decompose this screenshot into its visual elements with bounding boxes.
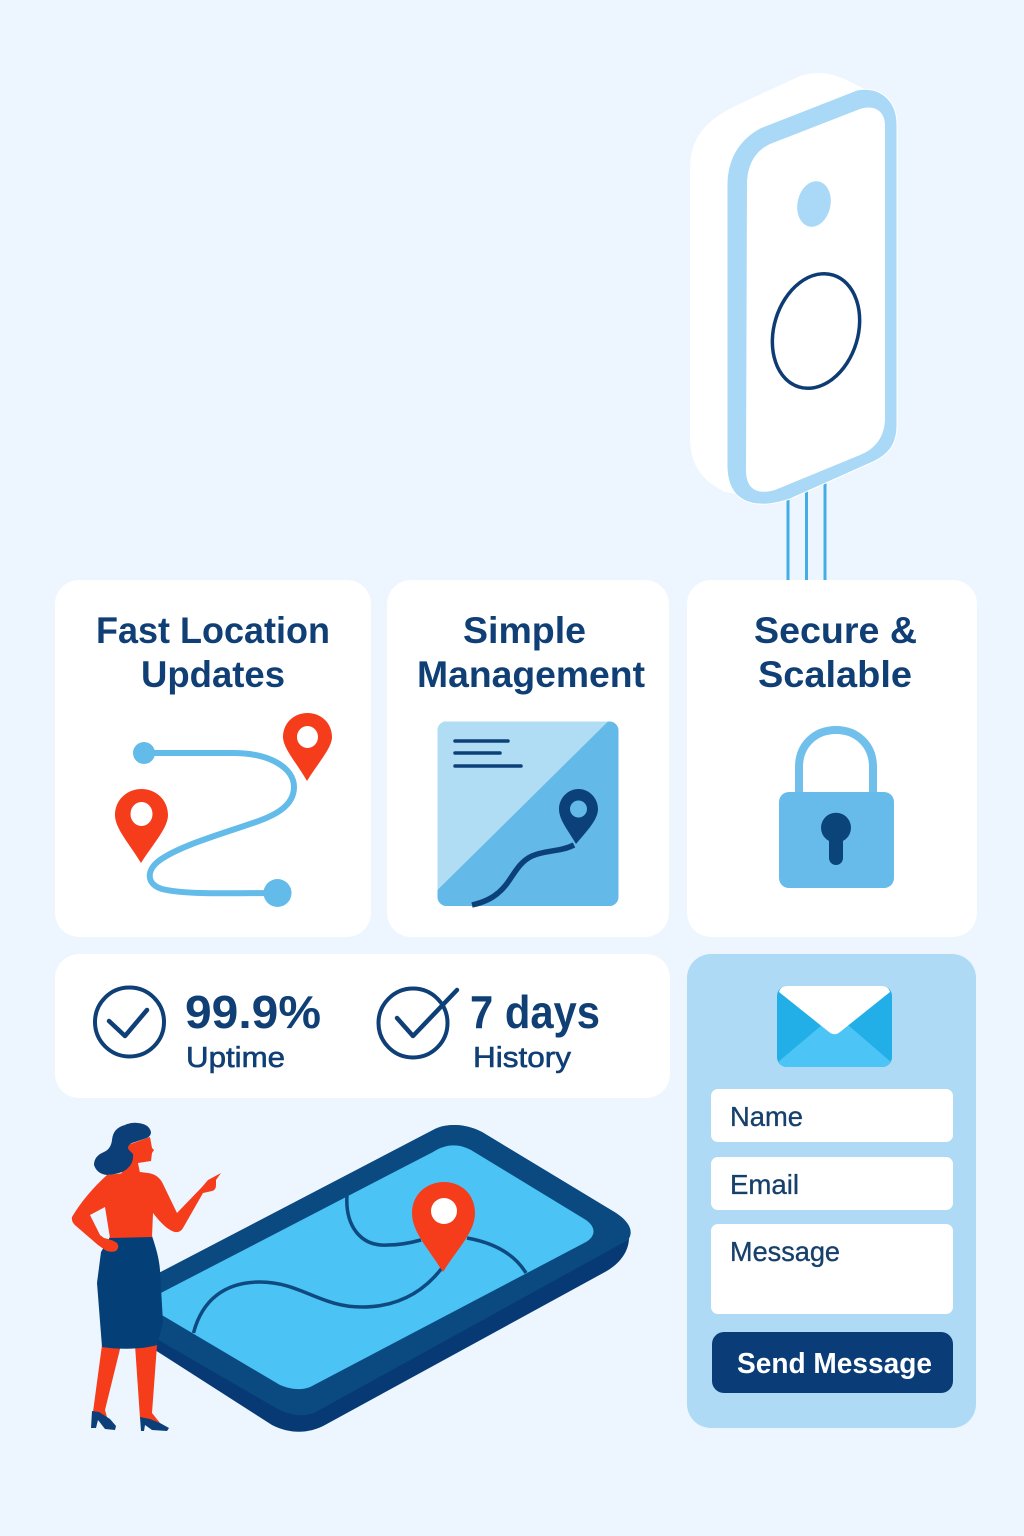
stat: history value: 7 days — [470, 986, 600, 1038]
panel: contact form — [687, 954, 976, 1428]
envelope top flap — [779, 986, 890, 1034]
woman legs — [93, 1345, 160, 1423]
pin lower hole — [130, 802, 152, 826]
card background — [687, 580, 977, 937]
heading: Secure & — [754, 610, 917, 651]
device front frame — [727, 89, 897, 504]
document folded light area — [438, 722, 608, 890]
lock keyhole — [821, 813, 851, 865]
button: send message — [712, 1332, 953, 1393]
map pin hole — [431, 1198, 457, 1224]
stats background — [55, 954, 670, 1098]
pin upper — [283, 713, 332, 781]
panel: stats — [55, 954, 670, 1098]
document text lines — [455, 741, 521, 766]
illustration: phone with map — [155, 1125, 631, 1432]
card background — [55, 580, 371, 937]
icon: uptime check — [95, 988, 164, 1056]
field: name: Name — [730, 1101, 803, 1132]
heading: Updates — [141, 654, 285, 695]
panel: secure and scalable — [687, 580, 977, 937]
map road — [472, 845, 574, 905]
device face — [746, 107, 885, 492]
device button ring — [759, 263, 873, 399]
woman skirt — [97, 1236, 163, 1349]
stat: uptime label: Uptime — [186, 1042, 285, 1074]
heading: Fast Location — [96, 610, 330, 651]
phone top face — [155, 1125, 631, 1415]
card background — [387, 580, 669, 937]
panel: simple management — [387, 580, 669, 937]
woman body and arms — [72, 1172, 221, 1252]
device cables — [788, 483, 825, 580]
pin upper hole — [297, 726, 318, 748]
route path — [144, 753, 294, 893]
icon: history check — [378, 988, 457, 1058]
stat: uptime value: 99.9% — [185, 986, 321, 1038]
heading: Management — [417, 654, 645, 695]
map pin — [559, 789, 598, 844]
phone side — [155, 1125, 629, 1432]
button: send message: Send Message — [737, 1348, 932, 1380]
device sensor — [793, 178, 835, 230]
map pin hole — [570, 800, 587, 818]
heading: Scalable — [758, 654, 912, 695]
device back shell — [690, 73, 880, 500]
route start dot — [133, 742, 155, 764]
lock shackle — [799, 730, 873, 795]
icon: route with pins — [115, 713, 332, 907]
icon: envelope — [777, 986, 892, 1067]
woman shoes — [91, 1411, 169, 1431]
envelope lower flap — [778, 1025, 891, 1067]
icon: document map — [438, 722, 618, 906]
phone screen — [155, 1145, 594, 1389]
pin lower — [115, 789, 168, 863]
form background — [687, 954, 976, 1428]
field: name — [711, 1089, 953, 1142]
map roads — [194, 1195, 526, 1333]
stat: history label: History — [473, 1042, 572, 1074]
envelope body — [777, 986, 892, 1067]
field: email — [711, 1157, 953, 1210]
icon: wall-mounted device — [690, 73, 897, 580]
document sheet — [438, 722, 618, 906]
field: email: Email — [730, 1169, 799, 1200]
woman hair — [94, 1123, 151, 1175]
illustration: woman pointing — [72, 1123, 221, 1431]
field: message: Message — [730, 1236, 840, 1267]
icon: padlock — [779, 730, 894, 888]
heading: Simple — [463, 610, 586, 651]
lock body — [779, 792, 894, 888]
route end dot — [264, 879, 292, 907]
map pin — [412, 1182, 475, 1272]
field: message — [711, 1224, 953, 1314]
panel: fast location updates — [55, 580, 371, 937]
woman face and neck — [120, 1137, 154, 1176]
